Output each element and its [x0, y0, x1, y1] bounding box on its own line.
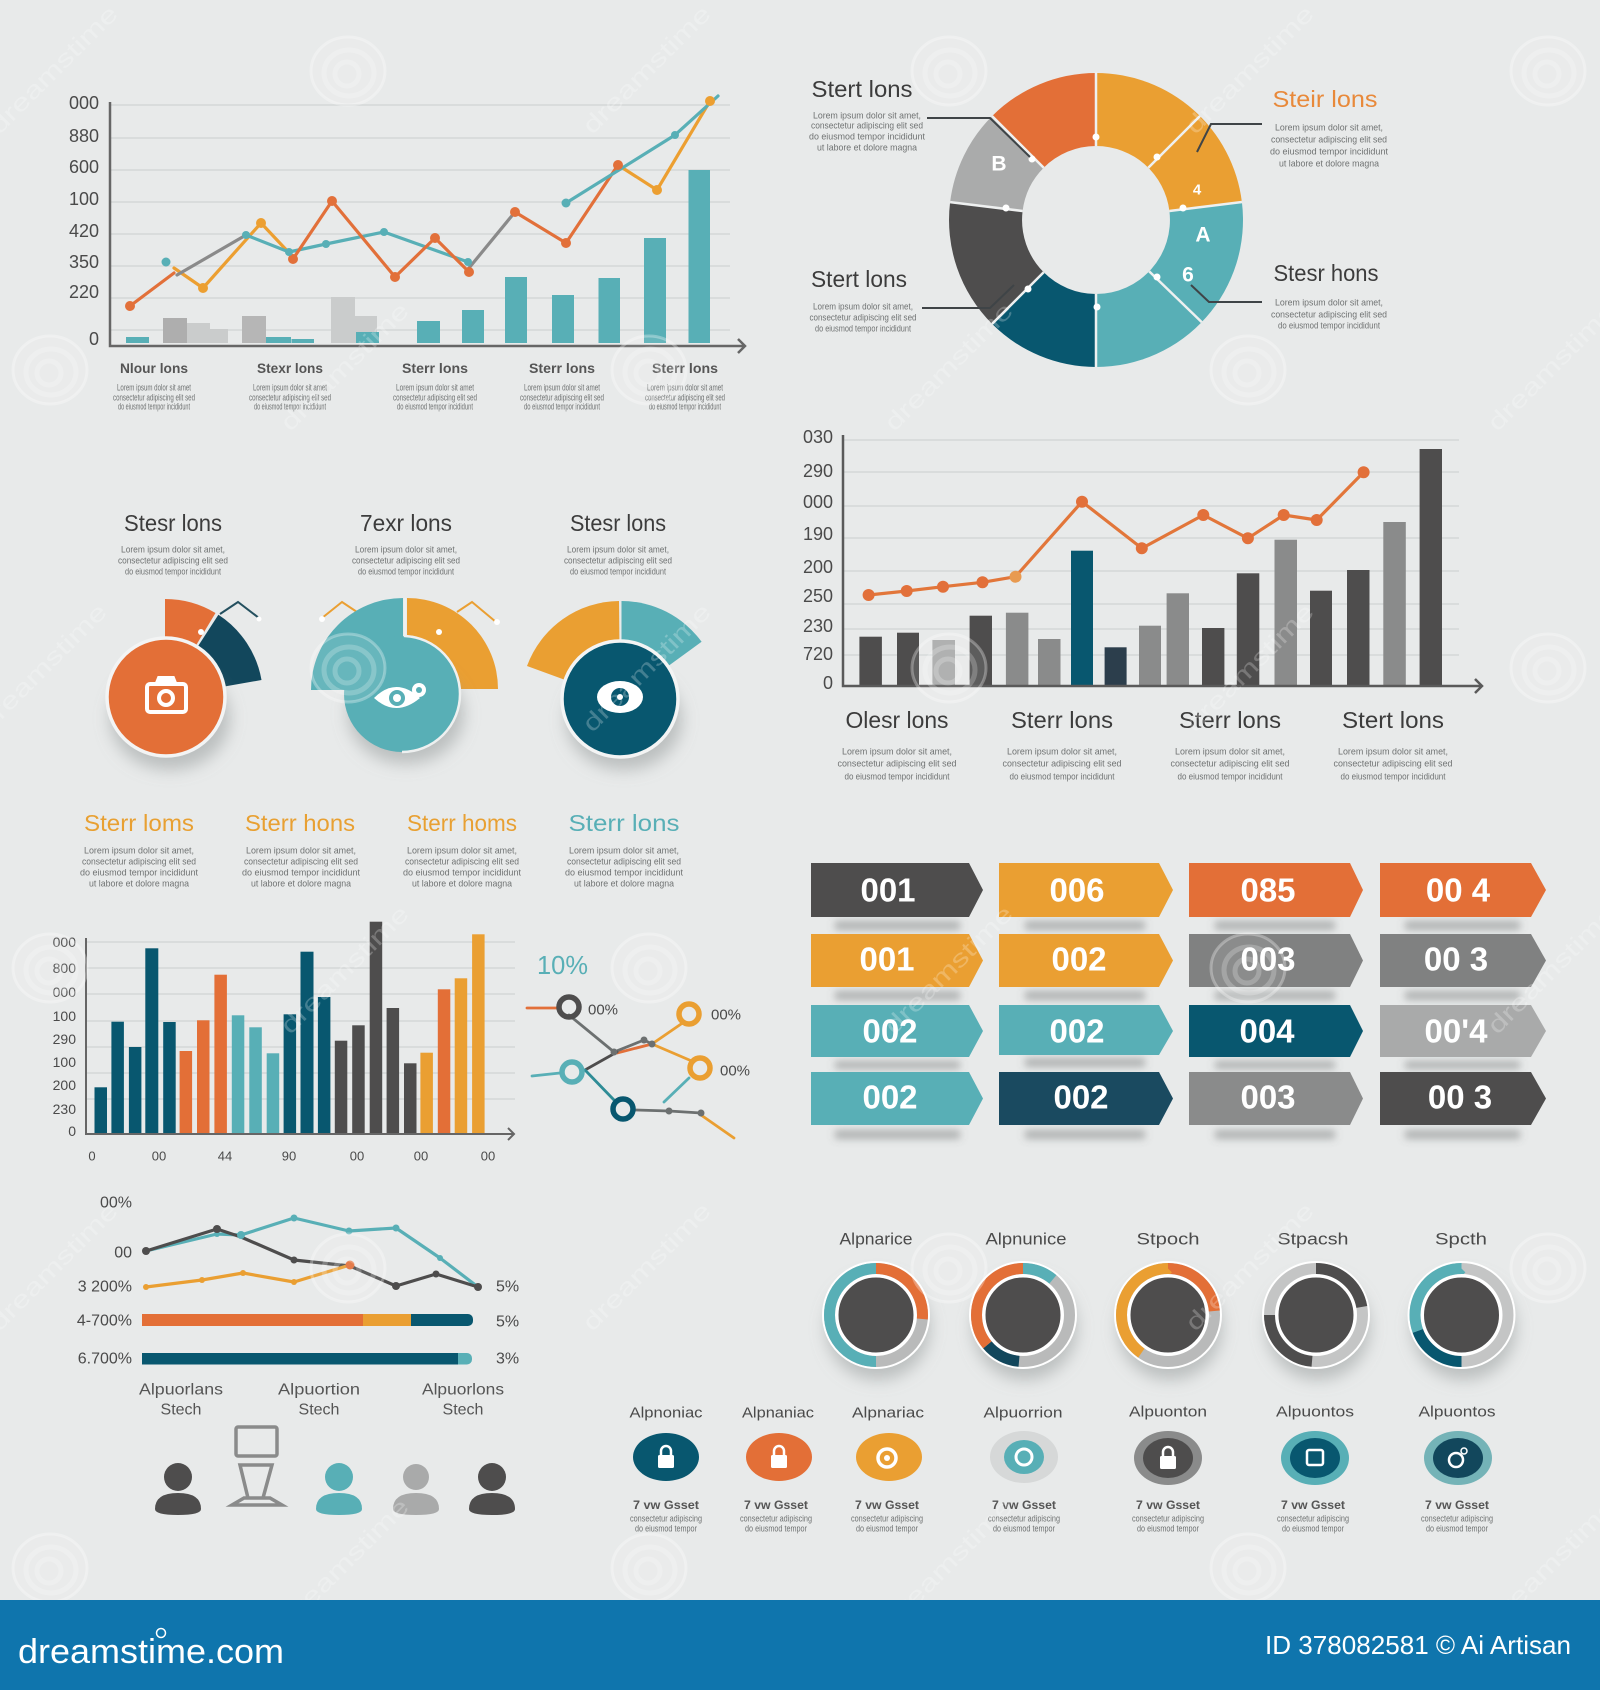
y axis labels: 230 [53, 1101, 76, 1117]
column captions: Lorem ipsum dolor sit amet, [1175, 746, 1285, 758]
caption 1: ut labore et dolore magna [89, 878, 190, 890]
column captions: Lorem ipsum dolor sit amet, [1338, 746, 1448, 758]
column captions: consectetur adipiscing elit sed [113, 392, 195, 404]
multicolour bar chart [53, 922, 515, 1164]
tile 2-1 [811, 934, 983, 987]
y axis labels: 800 [53, 960, 76, 976]
callout: bottom left: Lorem ipsum dolor sit amet, [813, 302, 913, 312]
panel: camera circle [107, 510, 262, 770]
icon: eye [374, 683, 426, 708]
caption 3: ut labore et dolore magna [412, 878, 513, 890]
x axis labels [88, 1148, 495, 1164]
y axis labels [69, 93, 99, 349]
column captions: Sterr lons [1179, 707, 1281, 733]
connecting lines [527, 1008, 734, 1138]
badge 3: Alpnariac [852, 1404, 925, 1422]
callout: top right [1270, 86, 1388, 170]
right labels: 3% [496, 1350, 519, 1368]
panel: dark eye circle [527, 510, 702, 770]
text: dreamstime [1482, 1493, 1600, 1633]
callout: bottom left: do eiusmod tempor incididunt [815, 324, 911, 334]
y axis labels: 290 [53, 1031, 76, 1047]
donut chart with callouts: top right [809, 72, 1388, 367]
gauge 2: Alpnunice [986, 1230, 1066, 1248]
badge 6: consectetur adipiscing [1277, 1514, 1349, 1524]
badge 4: Alpuorrion [984, 1404, 1062, 1422]
y axis labels: 0 [89, 329, 99, 349]
tile 1-3: 085 [1240, 872, 1296, 908]
badge 1: consectetur adipiscing [630, 1514, 702, 1524]
node labels: 00% [588, 1002, 618, 1018]
gauge 4 [1262, 1230, 1370, 1380]
left labels: 00 [114, 1244, 132, 1262]
caption 1 [80, 810, 198, 890]
panel: camera circle: consectetur adipiscing elit sed [118, 556, 228, 566]
tile 2-3 [1189, 934, 1363, 987]
badge 1 [630, 1404, 703, 1534]
headline percentage: 10% [537, 950, 588, 980]
tile 4-1 [811, 1072, 983, 1125]
panel: camera circle: Lorem ipsum dolor sit amet, [121, 544, 225, 556]
x axis labels: 44 [218, 1148, 232, 1164]
badge 7 [1418, 1404, 1496, 1534]
gauge 3 [1114, 1230, 1222, 1380]
y axis labels: 0 [68, 1123, 76, 1139]
footer logo: dreamstime.com [18, 1633, 284, 1671]
column captions: do eiusmod tempor incididunt [118, 402, 190, 412]
y axis labels: 200 [53, 1077, 76, 1093]
y axis labels [803, 427, 833, 693]
tile 2-4 [1380, 934, 1546, 987]
text: dreamstime [1482, 900, 1600, 1040]
teal bars [126, 170, 710, 343]
column captions: do eiusmod tempor incididunt [397, 402, 473, 412]
caption 4: consectetur adipiscing elit sed [567, 856, 681, 868]
caption 2: ut labore et dolore magna [251, 878, 352, 890]
node labels [588, 1002, 750, 1080]
tile 1-4: 00 4 [1426, 872, 1491, 908]
caption 4: ut labore et dolore magna [574, 878, 675, 890]
callout: bottom right [1271, 260, 1387, 332]
badge 2: consectetur adipiscing [740, 1514, 812, 1524]
grey bars [163, 297, 377, 343]
ring nodes [559, 997, 710, 1119]
left labels: 6.700% [78, 1350, 132, 1368]
y axis labels: 200 [803, 557, 833, 577]
three circular icon panels [107, 510, 702, 770]
tile 1-2: 006 [1049, 872, 1105, 908]
column captions: Stexr lons [257, 360, 323, 376]
caption 3: do eiusmod tempor incididunt [403, 868, 521, 878]
y axis labels: 220 [69, 282, 99, 302]
text: dreamstime [879, 1493, 1019, 1633]
callout: top left: consectetur adipiscing elit sed [811, 120, 923, 132]
icon: person dark [469, 1463, 515, 1515]
network diagram [527, 950, 750, 1138]
badge 6: 7 vw Gsset [1281, 1498, 1345, 1512]
tile 3-3: 004 [1239, 1012, 1295, 1050]
callout: bottom right: Stesr hons [1274, 260, 1378, 286]
text: dreamstime [1180, 1197, 1320, 1337]
column captions: consectetur adipiscing elit sed [1170, 758, 1290, 770]
badge 7: do eiusmod tempor [1426, 1524, 1488, 1534]
left labels: 3 200% [78, 1278, 132, 1296]
icon: person grey [393, 1464, 439, 1515]
tile 2-1: 001 [859, 940, 915, 978]
right labels: 5% [496, 1314, 519, 1330]
column captions: Lorem ipsum dolor sit amet [396, 382, 474, 394]
column captions: do eiusmod tempor incididunt [1010, 772, 1115, 782]
column captions: consectetur adipiscing elit sed [520, 392, 604, 404]
text: dreamstime [577, 0, 717, 140]
callout: top right: ut labore et dolore magna [1279, 158, 1380, 170]
callout: top right: Lorem ipsum dolor sit amet, [1275, 122, 1383, 134]
icon: person dark [155, 1463, 201, 1515]
column captions: Sterr lons [402, 360, 468, 376]
tile 4-2: 002 [1053, 1078, 1109, 1116]
badge 5 [1129, 1404, 1207, 1534]
footer credit: ID 378082581 © Ai Artisan [1265, 1630, 1571, 1660]
tile 4-1: 002 [862, 1078, 918, 1116]
badge 6: Alpuontos [1276, 1404, 1354, 1420]
caption 1: consectetur adipiscing elit sed [82, 856, 196, 868]
icon: camera [147, 678, 186, 712]
caption 4 [565, 810, 683, 890]
tile 3-4: 00'4 [1425, 1012, 1488, 1050]
panel: dark eye circle: consectetur adipiscing elit sed [564, 556, 672, 566]
callout: top left: Lorem ipsum dolor sit amet, [813, 110, 921, 122]
badge 4: do eiusmod tempor [993, 1524, 1055, 1534]
column captions: consectetur adipiscing elit sed [249, 392, 331, 404]
y axis labels [53, 934, 76, 1139]
caption 2: Sterr hons [245, 810, 355, 836]
column captions: Olesr lons [846, 707, 948, 733]
column captions: Lorem ipsum dolor sit amet [117, 382, 191, 394]
trend lines [125, 96, 718, 311]
bars [859, 449, 1442, 686]
y axis labels: 100 [69, 189, 99, 209]
column captions: consectetur adipiscing elit sed [645, 392, 725, 404]
gauge 2 [969, 1230, 1077, 1380]
badge 7: 7 vw Gsset [1425, 1498, 1489, 1512]
column captions: Stech [299, 1402, 339, 1418]
y axis labels: 350 [69, 252, 99, 272]
callout: top right: consectetur adipiscing elit sed [1271, 134, 1387, 146]
column captions: Lorem ipsum dolor sit amet [647, 382, 723, 394]
panel: camera circle: do eiusmod tempor incididunt [125, 566, 221, 578]
panel: camera circle: Stesr lons [124, 510, 222, 536]
callout: bottom right: do eiusmod tempor incididunt [1278, 320, 1380, 332]
text: dreamstime [1180, 598, 1320, 738]
four captions row [80, 810, 683, 890]
column captions: do eiusmod tempor incididunt [844, 772, 950, 782]
y axis labels: 230 [803, 616, 833, 636]
caption 3 [403, 810, 521, 890]
badge 7: Alpuontos [1418, 1404, 1496, 1420]
donut segments [949, 72, 1243, 367]
panel: teal eye circle: do eiusmod tempor incididunt [358, 566, 454, 578]
y axis labels: 100 [53, 1008, 76, 1024]
callout: top left: ut labore et dolore magna [817, 142, 918, 154]
tile 4-2 [999, 1072, 1173, 1125]
gauge 3: Stpoch [1136, 1230, 1200, 1248]
y axis labels: 000 [53, 984, 76, 1000]
seven badge row [630, 1404, 1496, 1534]
panel: dark eye circle: Lorem ipsum dolor sit amet, [567, 544, 669, 556]
line and bar chart: top left [69, 93, 745, 412]
badge 7: consectetur adipiscing [1421, 1514, 1493, 1524]
y axis labels: 880 [69, 126, 99, 146]
panel: teal eye circle: 7exr lons [360, 510, 452, 536]
arrow tile grid [811, 863, 1546, 1139]
y axis labels: 000 [803, 492, 833, 512]
x axis labels: 0 [88, 1148, 96, 1164]
tile 2-2: 002 [1051, 940, 1107, 978]
caption 1: Lorem ipsum dolor sit amet, [84, 846, 194, 856]
badge 2: Alpnaniac [742, 1404, 815, 1422]
column captions: Stech [161, 1402, 201, 1418]
badge 3: do eiusmod tempor [856, 1524, 918, 1534]
caption 3: Sterr homs [407, 810, 517, 836]
caption 2: Lorem ipsum dolor sit amet, [246, 846, 356, 856]
column captions: Alpuorlons [422, 1382, 504, 1398]
badge 5: 7 vw Gsset [1136, 1498, 1200, 1512]
column captions: Stech [443, 1402, 483, 1418]
y axis labels: 250 [803, 586, 833, 606]
left labels: 4-700% [77, 1312, 132, 1330]
y axis labels: 000 [69, 93, 99, 113]
segment letters: A [1195, 224, 1211, 246]
segment letters: B [991, 152, 1007, 176]
gauge 5 [1408, 1230, 1516, 1380]
gauge 5: Spcth [1435, 1230, 1487, 1248]
tile 1-4 [1380, 863, 1546, 917]
column captions: do eiusmod tempor incididunt [1178, 772, 1283, 782]
badge 1: 7 vw Gsset [633, 1498, 699, 1512]
tile 4-4 [1380, 1072, 1546, 1125]
tile 3-4 [1380, 1005, 1546, 1057]
column captions: Lorem ipsum dolor sit amet, [842, 746, 952, 758]
tile 2-4: 00 3 [1424, 940, 1488, 978]
column captions: Sterr lons [529, 360, 595, 376]
column captions: Sterr lons [652, 360, 718, 376]
tile 1-1 [811, 863, 983, 917]
caption 3: Lorem ipsum dolor sit amet, [407, 846, 517, 856]
caption 2 [242, 810, 360, 890]
y axis labels: 290 [803, 461, 833, 481]
column captions: consectetur adipiscing elit sed [1334, 758, 1452, 770]
badge 2: 7 vw Gsset [744, 1498, 808, 1512]
callout: top right: Steir lons [1272, 86, 1378, 112]
badge 1: Alpnoniac [630, 1404, 703, 1422]
tile 3-3 [1189, 1005, 1363, 1057]
callout: bottom left [810, 266, 916, 334]
footer bar [0, 1600, 1600, 1690]
tile 1-1: 001 [860, 872, 916, 908]
caption 4: do eiusmod tempor incididunt [565, 868, 683, 878]
column captions: Lorem ipsum dolor sit amet [253, 382, 327, 394]
column captions [139, 1382, 504, 1418]
caption 1: Sterr loms [84, 810, 194, 836]
segment letters: 4 [1193, 182, 1202, 198]
tile 3-1 [811, 1005, 983, 1057]
callout: bottom left: consectetur adipiscing elit sed [810, 312, 916, 324]
column captions [838, 707, 1452, 782]
axes [843, 435, 1482, 693]
badge 3 [851, 1404, 925, 1534]
axes [86, 938, 514, 1140]
y axis labels: 600 [69, 157, 99, 177]
panel: dark eye circle: do eiusmod tempor incididunt [570, 566, 666, 578]
text: dreamstime [275, 297, 415, 437]
column captions: Alpuorlans [139, 1382, 223, 1398]
text: dreamstime [275, 1493, 415, 1633]
segment letters: 6 [1182, 264, 1194, 286]
text: dreamstime [577, 1197, 717, 1337]
column captions: Stert lons [1342, 707, 1444, 733]
column captions: Sterr lons [1011, 707, 1113, 733]
right labels [496, 1278, 519, 1368]
callout: top left [809, 76, 925, 154]
badge 1: do eiusmod tempor [635, 1524, 697, 1534]
panel: teal eye circle [311, 510, 500, 764]
x axis labels: 00 [152, 1148, 166, 1164]
caption 3: consectetur adipiscing elit sed [405, 856, 519, 868]
text: dreamstime [1482, 297, 1600, 437]
tile 2-2 [999, 934, 1173, 987]
text: dreamstime [879, 900, 1019, 1040]
five ring gauges [822, 1230, 1516, 1380]
node labels: 00% [711, 1006, 741, 1024]
segment letters [991, 152, 1211, 286]
column captions: consectetur adipiscing elit sed [393, 392, 477, 404]
badge 3: consectetur adipiscing [851, 1514, 923, 1524]
connector lines [922, 118, 1262, 308]
caption 2: do eiusmod tempor incididunt [242, 868, 360, 878]
axes [110, 102, 745, 353]
caption 4: Sterr lons [568, 810, 680, 836]
right labels: 5% [496, 1278, 519, 1296]
line chart with progress bars [77, 1194, 519, 1515]
column captions: consectetur adipiscing elit sed [838, 758, 956, 770]
tile 1-3 [1189, 863, 1363, 917]
caption 2: consectetur adipiscing elit sed [244, 856, 358, 868]
left labels [77, 1194, 132, 1368]
tile 3-2: 002 [1049, 1012, 1105, 1050]
panel: teal eye circle: consectetur adipiscing elit sed [352, 556, 460, 566]
tile 4-3: 003 [1240, 1078, 1296, 1116]
callout: bottom right: consectetur adipiscing elit sed [1271, 310, 1387, 320]
badge 4 [984, 1404, 1062, 1534]
y axis labels: 0 [823, 673, 833, 693]
y axis labels: 190 [803, 524, 833, 544]
x axis labels: 00 [350, 1148, 364, 1164]
y axis labels: 720 [803, 644, 833, 664]
column captions: do eiusmod tempor incididunt [254, 402, 326, 412]
callout: bottom left: Stert lons [811, 266, 907, 292]
x axis labels: 90 [282, 1148, 296, 1164]
gauge 4: Stpacsh [1278, 1230, 1348, 1248]
panel: dark eye circle: Stesr lons [570, 510, 666, 536]
y axis labels: 000 [53, 934, 76, 950]
column captions: Lorem ipsum dolor sit amet [524, 382, 600, 394]
badge 2: do eiusmod tempor [745, 1524, 807, 1534]
column captions: do eiusmod tempor incididunt [1340, 772, 1446, 782]
badge 6: do eiusmod tempor [1282, 1524, 1344, 1534]
y axis labels: 030 [803, 427, 833, 447]
badge 4: consectetur adipiscing [988, 1514, 1060, 1524]
icon: person teal [316, 1463, 362, 1515]
text: dreamstime [577, 598, 717, 738]
text: dreamstime [275, 900, 415, 1040]
caption 1: do eiusmod tempor incididunt [80, 868, 198, 878]
tile 4-3 [1189, 1072, 1363, 1125]
x axis labels: 00 [414, 1148, 428, 1164]
bars [94, 922, 485, 1133]
text: dreamstime [879, 297, 1019, 437]
column captions [113, 360, 725, 412]
bar and line chart: right [803, 427, 1482, 782]
icon: eye [597, 681, 643, 713]
column captions: Nlour lons [120, 360, 188, 376]
left labels: 00% [100, 1194, 132, 1212]
column captions: Lorem ipsum dolor sit amet, [1007, 746, 1117, 758]
y axis labels: 100 [53, 1054, 76, 1070]
orange trend line [863, 466, 1370, 601]
column captions: Alpuortion [278, 1382, 360, 1398]
caption 4: Lorem ipsum dolor sit amet, [569, 846, 679, 856]
panel: teal eye circle: Lorem ipsum dolor sit amet, [355, 544, 457, 556]
column captions: consectetur adipiscing elit sed [1002, 758, 1122, 770]
icon: monitor [232, 1427, 282, 1505]
badge 6 [1276, 1404, 1354, 1534]
tile 3-2 [999, 1005, 1173, 1055]
tile 1-2 [999, 863, 1173, 917]
node labels: 00% [720, 1062, 750, 1080]
trend lines [142, 1214, 482, 1291]
y axis labels: 420 [69, 221, 99, 241]
tile 2-3: 003 [1240, 940, 1296, 978]
x axis labels: 00 [481, 1148, 495, 1164]
badge 2 [740, 1404, 815, 1534]
badge 5: do eiusmod tempor [1137, 1524, 1199, 1534]
gauge 1 [822, 1230, 930, 1380]
badge 5: Alpuonton [1129, 1404, 1207, 1420]
callout: top left: Stert lons [812, 76, 912, 102]
tile 3-1: 002 [862, 1012, 918, 1050]
callout: top right: do eiusmod tempor incididunt [1270, 146, 1388, 158]
callout: top left: do eiusmod tempor incididunt [809, 132, 925, 142]
text: dreamstime [1180, 0, 1320, 140]
badge 3: 7 vw Gsset [855, 1498, 919, 1512]
badge 5: consectetur adipiscing [1132, 1514, 1204, 1524]
gauge 1: Alpnarice [840, 1230, 912, 1248]
callout: bottom right: Lorem ipsum dolor sit amet, [1275, 298, 1383, 308]
badge 4: 7 vw Gsset [992, 1498, 1056, 1512]
column captions: do eiusmod tempor incididunt [524, 402, 600, 412]
column captions: do eiusmod tempor incididunt [649, 402, 721, 412]
progress bar 2 [142, 1353, 472, 1364]
tile 4-4: 00 3 [1428, 1078, 1492, 1116]
progress bar 1 [142, 1314, 473, 1326]
